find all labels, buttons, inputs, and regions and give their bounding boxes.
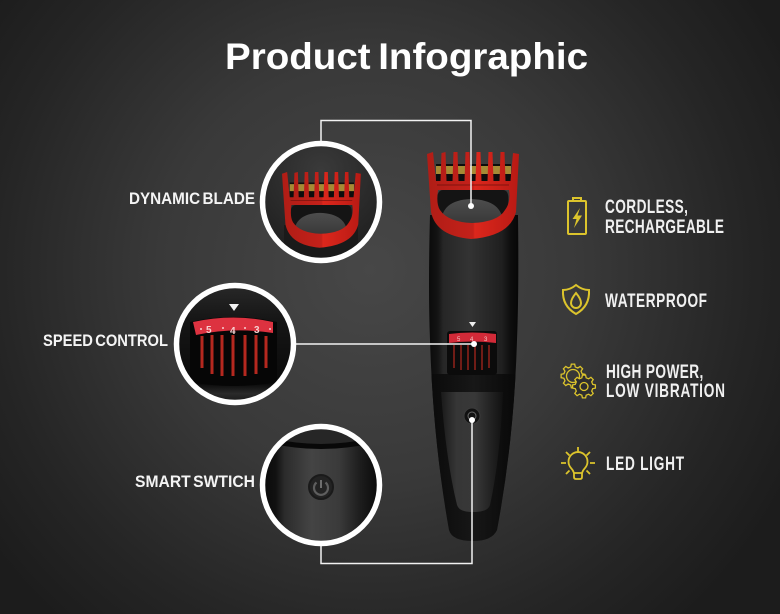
feature text: cordless, rechargeable: CORDLESS,	[605, 196, 688, 218]
connector dot: blade	[468, 203, 474, 209]
feature text: cordless, rechargeable: RECHARGEABLE	[605, 216, 724, 238]
connector: smart switch	[321, 420, 472, 564]
icon: shield with water drop	[563, 285, 589, 314]
label: speed control: SPEED CONTROL	[43, 332, 168, 350]
title: Product Infographic	[225, 35, 588, 77]
label: smart switch: SMART SWTICH	[135, 473, 255, 491]
feature text: high power, low vibration: HIGH POWER,	[606, 361, 703, 383]
circle callout: smart switch	[260, 423, 382, 547]
trimmer body	[429, 215, 518, 541]
trimmer comb	[427, 152, 519, 239]
trimmer power button	[464, 408, 480, 424]
trimmer speed dial: 5	[457, 337, 461, 343]
trimmer speed dial: 3	[484, 337, 488, 343]
connector: speed control	[290, 343, 474, 345]
circle callout: dynamic blade	[260, 140, 382, 264]
icon: gears	[561, 364, 595, 398]
feature text: high power, low vibration: LOW VIBRATION	[606, 380, 725, 402]
trimmer speed dial: 4	[470, 337, 474, 343]
circle callout: speed control: 3	[254, 325, 260, 336]
circle callout: speed control: 4	[230, 326, 236, 337]
circle callout: speed control: 5	[206, 325, 212, 336]
feature text: waterproof: WATERPROOF	[605, 290, 707, 312]
trimmer lower grip	[432, 374, 516, 541]
connector dot: switch	[469, 417, 475, 423]
icon: battery	[568, 198, 586, 234]
icon: light bulb	[561, 447, 595, 479]
label: dynamic blade: DYNAMIC BLADE	[129, 190, 255, 208]
trimmer product	[425, 152, 523, 544]
trimmer speed dial	[447, 322, 497, 375]
circle callout: speed control	[174, 282, 296, 406]
feature text: cordless, rechargeable	[605, 196, 724, 238]
feature text: led light: LED LIGHT	[606, 453, 685, 475]
feature text: high power, low vibration	[606, 361, 725, 402]
trimmer switch panel	[441, 392, 503, 512]
connector dot: speed	[471, 341, 477, 347]
connector: dynamic blade	[321, 120, 471, 206]
